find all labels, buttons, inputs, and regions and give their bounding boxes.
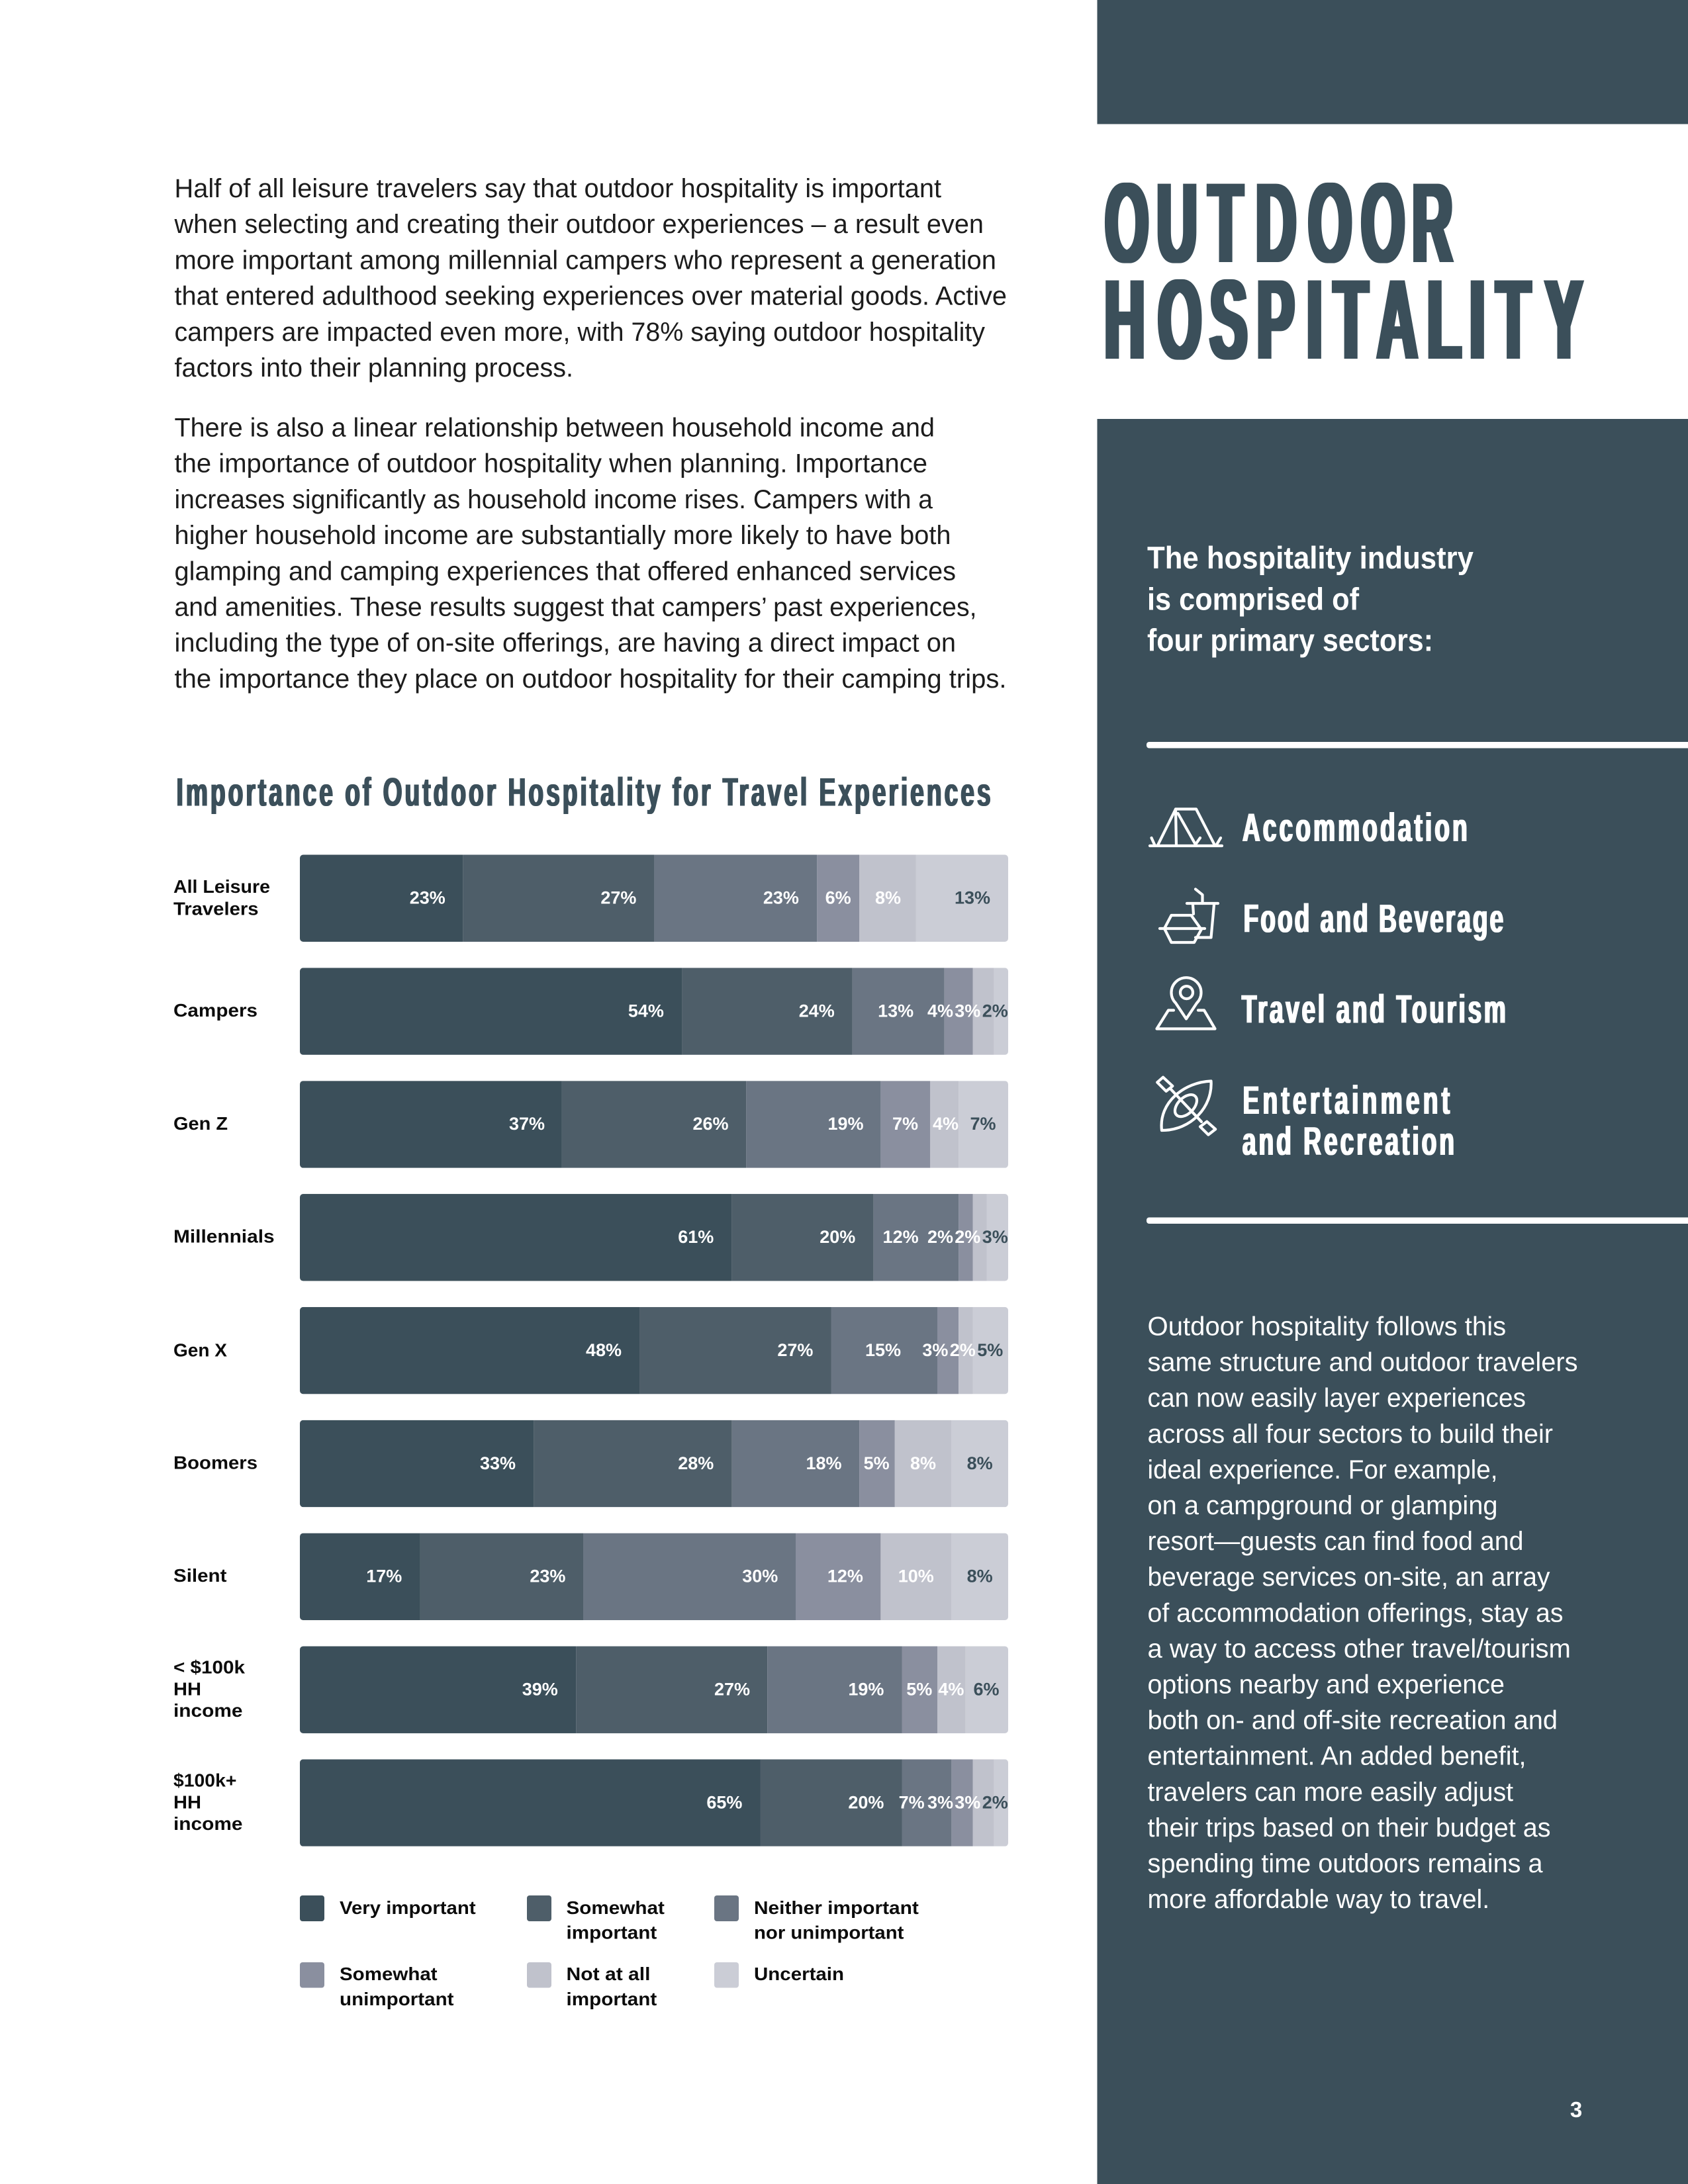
bar: under 100k income: 19% [848, 1679, 884, 1699]
panel: sidebar [1098, 419, 1688, 2184]
intro paragraph 1: that entered adulthood seeking experiences over material goods. Active [175, 282, 1007, 311]
bar: all leisure travelers: 27% [600, 888, 636, 908]
intro paragraph 2: the importance they place on outdoor hospitality for their camping trips. [175, 664, 1007, 694]
bar: silent: 30% [742, 1567, 778, 1586]
bar: millennials [300, 1194, 1008, 1281]
title [1105, 159, 1583, 383]
bar: campers: 4% [927, 1001, 953, 1021]
intro paragraph 2: and amenities. These results suggest that campers’ past experiences, [175, 593, 977, 622]
bar: gen z: 37% [509, 1114, 545, 1134]
bar: millennials: 61% [678, 1227, 714, 1247]
label: travel and tourism: Travel and Tourism [1242, 987, 1506, 1032]
sidebar body text: both on- and off-site recreation and [1148, 1706, 1558, 1735]
legend item: uncertain [714, 1962, 844, 1988]
label: food and beverage: Food and Beverage [1244, 896, 1503, 941]
bar: silent: 23% [530, 1567, 565, 1586]
sidebar heading: is comprised of [1147, 581, 1359, 617]
icon: food and drink [1160, 889, 1218, 942]
bar: boomers: 8% [967, 1453, 993, 1473]
icon: map pin [1157, 978, 1215, 1028]
label: entertainment and recreation: Entertainment [1243, 1078, 1450, 1122]
sidebar heading: The hospitality industry [1147, 540, 1474, 575]
bar: campers [300, 968, 1008, 1055]
bar: all leisure travelers: 6% [825, 888, 851, 908]
row label: all leisure travelers: Travelers [173, 899, 258, 919]
sidebar body text: same structure and outdoor travelers [1148, 1348, 1578, 1377]
bar: gen z: 7% [970, 1114, 996, 1134]
title: HOSPITALITY [1105, 255, 1583, 383]
sidebar body text: spending time outdoors remains a [1148, 1849, 1543, 1878]
bar: millennials: 2% [927, 1227, 953, 1247]
panel: top band [1098, 0, 1688, 124]
sidebar body text: a way to access other travel/tourism [1148, 1634, 1571, 1663]
intro paragraph 2 [175, 413, 1007, 694]
bar: gen z: 19% [827, 1114, 863, 1134]
bar: under 100k income: 6% [973, 1679, 1000, 1699]
bar: under 100k income [300, 1646, 1008, 1733]
bar: all leisure travelers: 13% [955, 888, 990, 908]
legend item: not at all important: important [567, 1989, 657, 2009]
legend [300, 1895, 919, 2009]
bar: millennials: 2% [955, 1227, 980, 1247]
row label: gen x: Gen X [173, 1340, 227, 1360]
legend item: neither: nor unimportant [754, 1922, 904, 1943]
bar: all leisure travelers: 23% [410, 888, 445, 908]
bar: millennials: 12% [883, 1227, 919, 1247]
sidebar body text: Outdoor hospitality follows this [1148, 1312, 1506, 1341]
title: OUTDOOR [1105, 159, 1452, 287]
legend item: somewhat unimportant [300, 1962, 454, 2009]
bar: gen z [300, 1081, 1008, 1168]
bar: boomers [300, 1420, 1008, 1507]
sidebar body text: of accommodation offerings, stay as [1148, 1598, 1564, 1627]
intro paragraph 2: glamping and camping experiences that offered enhanced services [175, 557, 956, 586]
intro paragraph 2: higher household income are substantially more likely to have both [175, 521, 951, 550]
bar: over 100k income: 20% [848, 1792, 884, 1812]
intro paragraph 1: more important among millennial campers who represent a generation [175, 246, 996, 275]
row label: boomers: Boomers [173, 1452, 258, 1473]
bar: gen x: 2% [950, 1340, 976, 1360]
bar: gen x: 15% [865, 1340, 901, 1360]
row label: under 100k income: HH [173, 1679, 201, 1700]
sidebar body text: more affordable way to travel. [1148, 1885, 1489, 1914]
bar: all leisure travelers [300, 855, 1008, 942]
bar: silent: 17% [366, 1567, 402, 1586]
bar: all leisure travelers: 23% [763, 888, 799, 908]
legend item: very important [300, 1895, 476, 1921]
intro paragraph 1 [174, 174, 1007, 383]
bar: under 100k income: 4% [938, 1679, 964, 1699]
bar: silent: 8% [967, 1567, 993, 1586]
row label: under 100k income: < $100k [173, 1657, 245, 1678]
legend item: neither [714, 1895, 919, 1943]
intro paragraph 1: Half of all leisure travelers say that outdoor hospitality is important [175, 174, 941, 203]
legend item: not at all important [527, 1962, 657, 2009]
sidebar body text: beverage services on-site, an array [1148, 1563, 1550, 1592]
bar: gen z: 4% [933, 1114, 959, 1134]
bar: boomers: 28% [678, 1453, 714, 1473]
bar: campers: 54% [628, 1001, 664, 1021]
intro paragraph 2: the importance of outdoor hospitality when planning. Importance [175, 449, 927, 478]
sidebar body text [1148, 1312, 1578, 1914]
row label: silent: Silent [173, 1565, 226, 1586]
bar: gen x: 48% [586, 1340, 622, 1360]
legend item: somewhat unimportant: unimportant [340, 1989, 454, 2009]
row label: millennials: Millennials [173, 1226, 275, 1247]
icon: tent [1150, 809, 1222, 846]
bar: silent: 12% [827, 1567, 863, 1586]
bar: over 100k income: 3% [927, 1792, 953, 1812]
legend item: somewhat important [527, 1895, 665, 1943]
sidebar body text: travelers can more easily adjust [1148, 1778, 1513, 1807]
bar: over 100k income: 2% [982, 1792, 1008, 1812]
bar: over 100k income: 65% [706, 1792, 742, 1812]
row label: over 100k income: HH [173, 1792, 201, 1813]
page number: 3 [1570, 2097, 1582, 2122]
bar: under 100k income: 39% [522, 1679, 558, 1699]
label: entertainment and recreation: and Recreation [1243, 1119, 1454, 1163]
sidebar body text: across all four sectors to build their [1148, 1420, 1553, 1449]
bar: campers: 13% [878, 1001, 914, 1021]
bar: boomers: 8% [910, 1453, 936, 1473]
bar: over 100k income [300, 1759, 1008, 1846]
bar: millennials: 3% [982, 1227, 1008, 1247]
row label: over 100k income: income [173, 1813, 242, 1834]
bar: boomers: 18% [806, 1453, 842, 1473]
bar: under 100k income: 27% [714, 1679, 750, 1699]
sidebar body text: entertainment. An added benefit, [1148, 1742, 1526, 1771]
sidebar body text: can now easily layer experiences [1148, 1384, 1526, 1413]
icon: kayak [1157, 1077, 1215, 1135]
row label: all leisure travelers: All Leisure [173, 876, 270, 897]
bar: campers: 3% [955, 1001, 980, 1021]
sidebar body text: their trips based on their budget as [1148, 1813, 1550, 1843]
sidebar body text: options nearby and experience [1148, 1670, 1505, 1700]
intro paragraph 1: when selecting and creating their outdoor experiences – a result even [174, 210, 984, 239]
intro paragraph 2: including the type of on-site offerings, are having a direct impact on [175, 629, 956, 658]
bar: over 100k income: 7% [899, 1792, 925, 1812]
legend item: somewhat important: important [567, 1922, 657, 1943]
bar: boomers: 5% [864, 1453, 890, 1473]
legend item: somewhat important: Somewhat [567, 1897, 665, 1918]
chart title: Importance of Outdoor Hospitality for Travel Experiences [177, 770, 991, 815]
legend item: very important: Very important [340, 1897, 476, 1918]
sidebar body text: ideal experience. For example, [1148, 1455, 1497, 1484]
sidebar body text: on a campground or glamping [1148, 1491, 1497, 1520]
intro paragraph 1: campers are impacted even more, with 78% saying outdoor hospitality [175, 318, 985, 347]
bar: gen x: 27% [777, 1340, 813, 1360]
bar: gen z: 7% [892, 1114, 918, 1134]
bar: over 100k income: 3% [955, 1792, 980, 1812]
row label: campers: Campers [173, 1000, 258, 1021]
row label: gen z: Gen Z [173, 1113, 228, 1134]
row label: under 100k income [173, 1657, 245, 1721]
bar: all leisure travelers: 8% [875, 888, 901, 908]
bar: gen x: 3% [922, 1340, 948, 1360]
bar: campers: 24% [799, 1001, 835, 1021]
intro paragraph 2: increases significantly as household income rises. Campers with a [175, 485, 933, 514]
legend item: somewhat unimportant: Somewhat [340, 1964, 438, 1984]
row label: over 100k income [173, 1770, 242, 1834]
sidebar body text: resort—guests can find food and [1148, 1527, 1524, 1556]
bar: under 100k income: 5% [906, 1679, 932, 1699]
bar: boomers: 33% [480, 1453, 516, 1473]
bar: silent: 10% [898, 1567, 934, 1586]
label: accommodation: Accommodation [1243, 805, 1468, 850]
intro paragraph 2: There is also a linear relationship between household income and [175, 413, 935, 442]
bar: millennials: 20% [820, 1227, 855, 1247]
legend item: not at all important: Not at all [567, 1964, 650, 1984]
row label: over 100k income: $100k+ [173, 1770, 236, 1790]
bar: gen z: 26% [692, 1114, 728, 1134]
label: entertainment and recreation [1243, 1078, 1454, 1163]
sidebar heading: four primary sectors: [1147, 622, 1433, 658]
bar: gen x [300, 1307, 1008, 1394]
legend item: neither: Neither important [754, 1897, 919, 1918]
bar: campers: 2% [982, 1001, 1008, 1021]
row label: all leisure travelers [173, 876, 270, 919]
intro paragraph 1: factors into their planning process. [175, 353, 573, 383]
stacked bar chart [173, 855, 1008, 1846]
bar: gen x: 5% [977, 1340, 1003, 1360]
bar: silent [300, 1533, 1008, 1620]
legend item: uncertain: Uncertain [754, 1964, 844, 1984]
row label: under 100k income: income [173, 1700, 242, 1721]
sidebar heading [1147, 540, 1474, 658]
